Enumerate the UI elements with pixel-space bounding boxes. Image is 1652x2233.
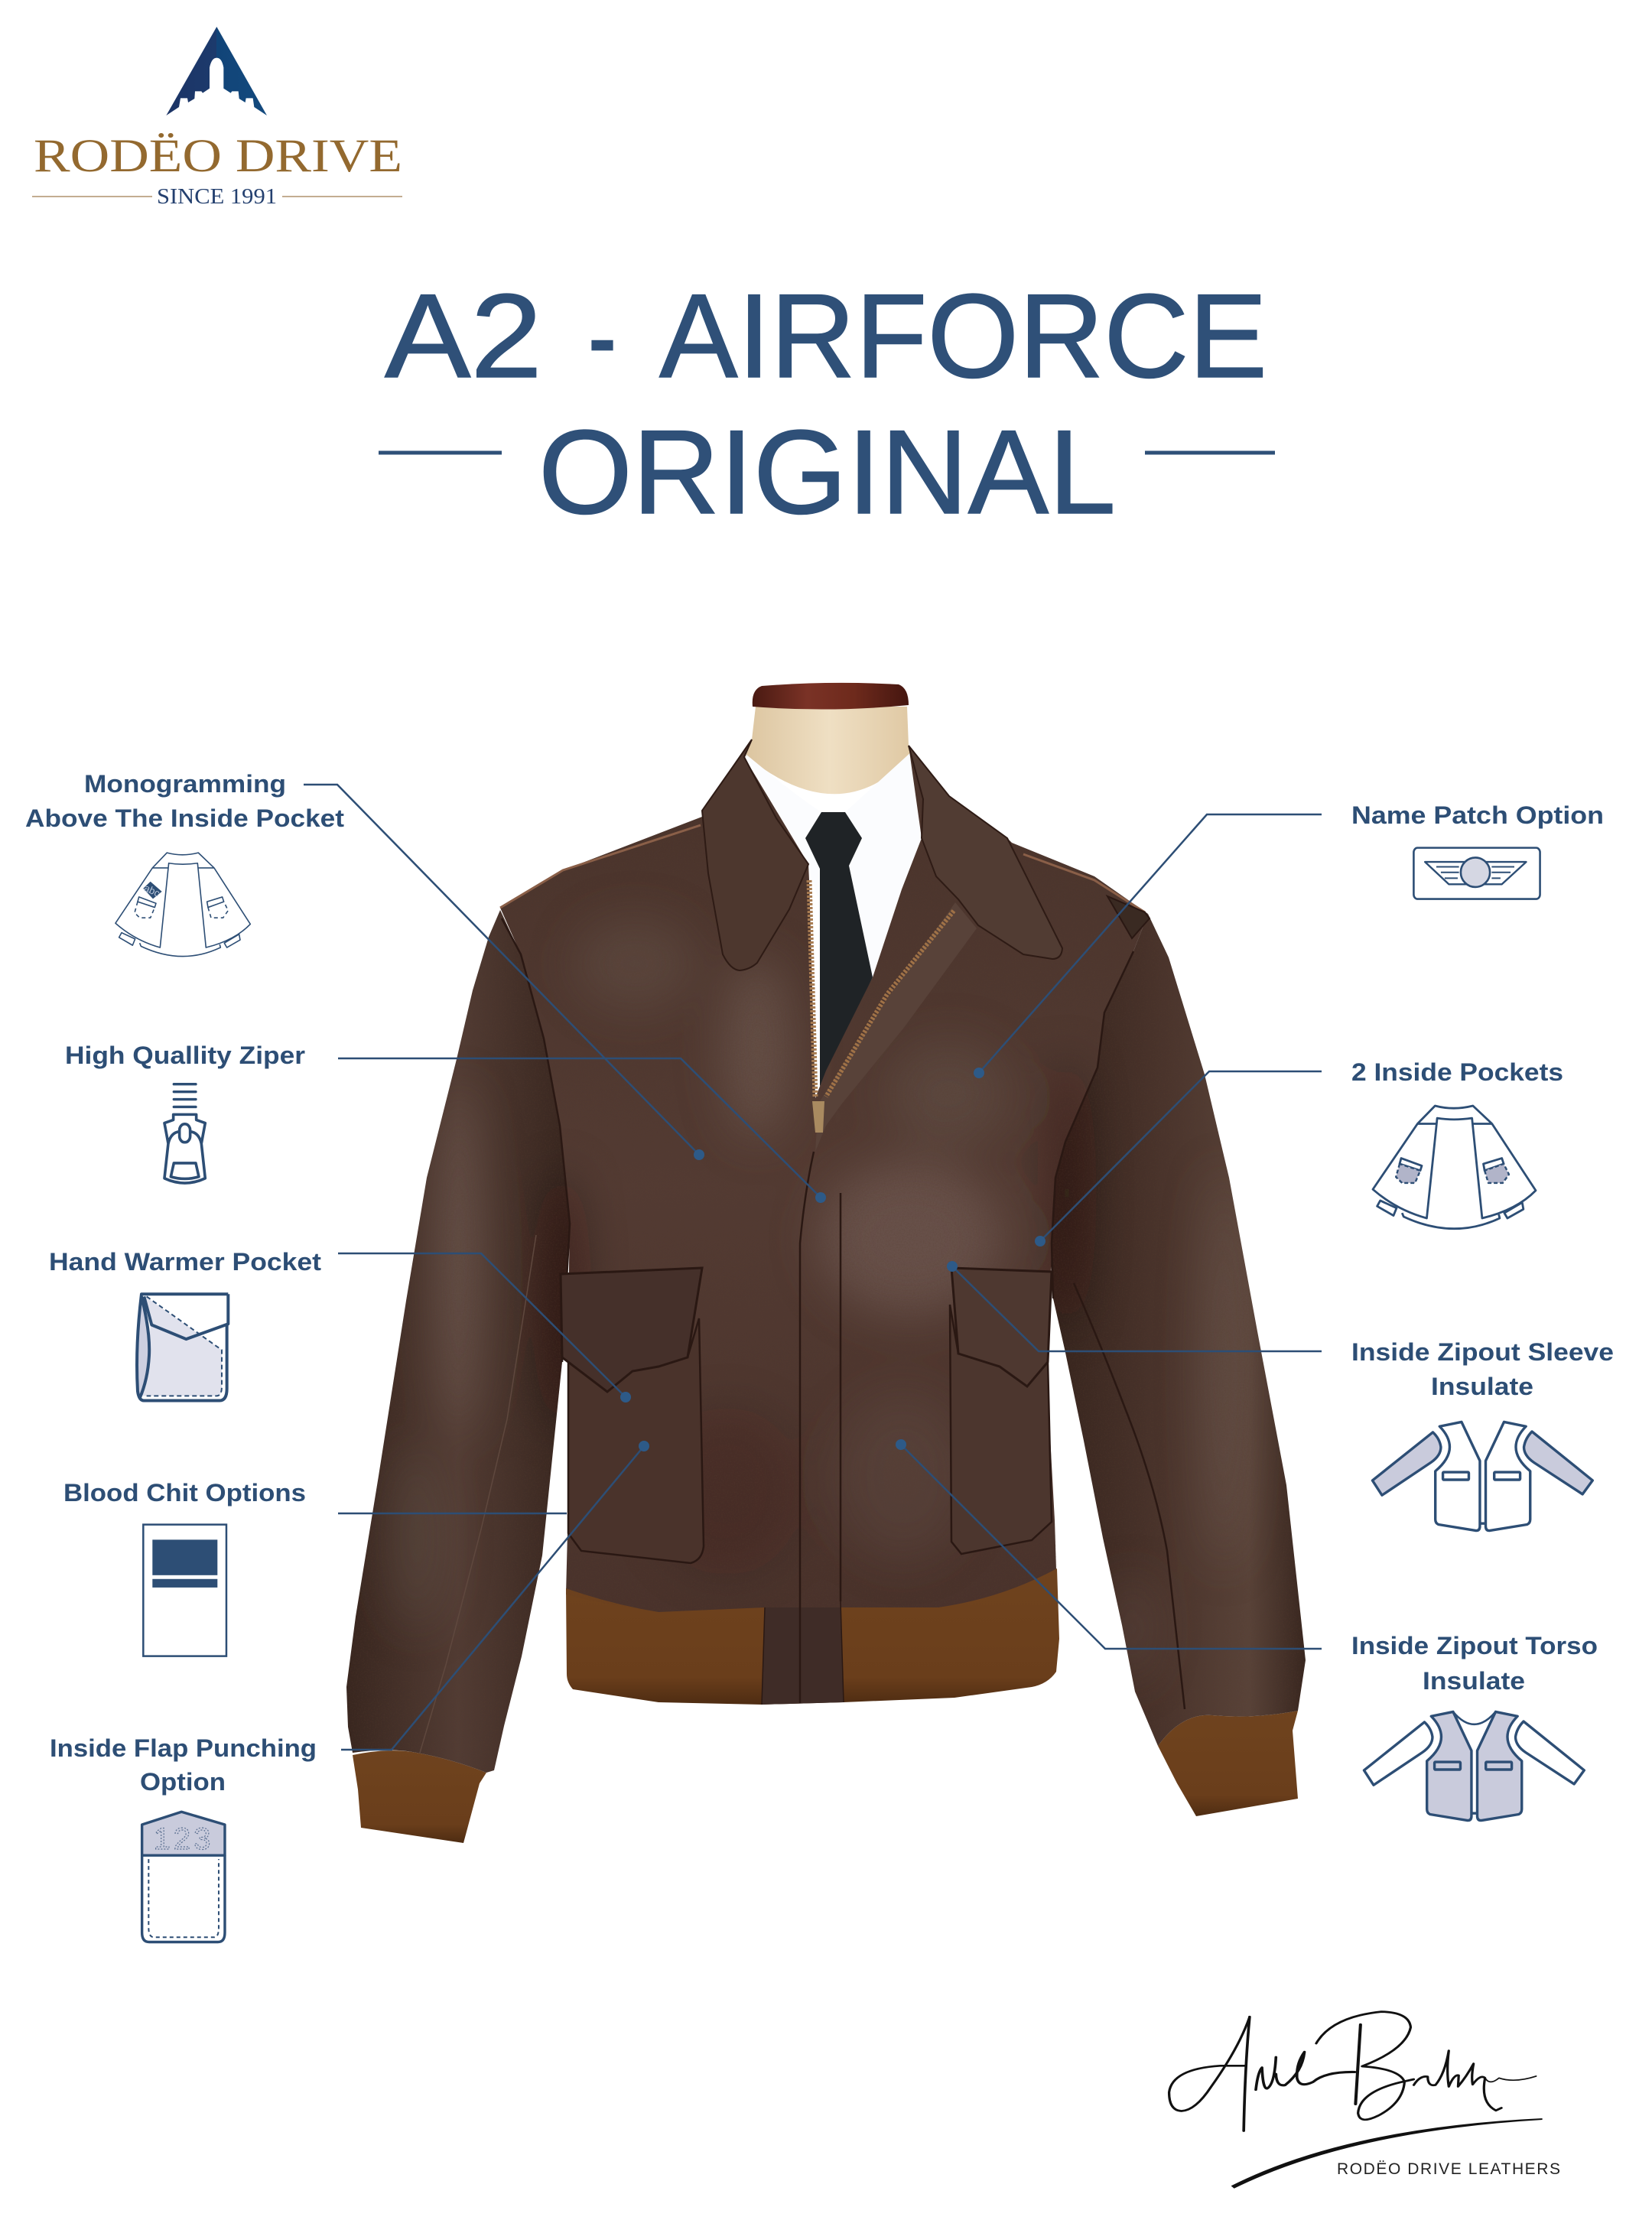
callout: monogramming xyxy=(304,785,704,1160)
icon text: punched digits: 123 xyxy=(154,1822,213,1856)
label: Hand Warmer Pocket xyxy=(49,1248,321,1276)
icon: pocket xyxy=(137,1294,228,1401)
left pocket xyxy=(561,1268,704,1563)
feature: name patch xyxy=(1351,801,1604,899)
feature: zipout sleeve xyxy=(1351,1338,1614,1531)
label: High Quallity Ziper xyxy=(65,1042,305,1069)
label line 2: Above The Inside Pocket xyxy=(25,804,344,832)
shoulder trim and seams xyxy=(420,825,1185,1753)
title xyxy=(379,270,1275,539)
callout: zipout sleeve xyxy=(947,1261,1322,1351)
title: - xyxy=(588,270,616,403)
label: Monogramming xyxy=(84,770,286,798)
right cuff xyxy=(1158,1711,1298,1816)
signature xyxy=(1169,2012,1560,2189)
label line 2: Insulate xyxy=(1431,1373,1533,1400)
left cuff xyxy=(353,1750,486,1843)
icon: zipper pull xyxy=(164,1084,205,1183)
title: AIRFORCE xyxy=(659,270,1267,403)
icon: chit card xyxy=(143,1525,226,1656)
hem band xyxy=(566,1568,1059,1705)
label: Inside Zipout Sleeve xyxy=(1351,1338,1614,1366)
right sleeve xyxy=(1048,914,1306,1746)
title: ORIGINAL xyxy=(538,406,1116,539)
signature strokes xyxy=(1169,2012,1543,2189)
title: A2 xyxy=(385,270,542,403)
label: 2 Inside Pockets xyxy=(1351,1058,1563,1086)
signature caption: RODËO DRIVE LEATHERS xyxy=(1337,2160,1560,2178)
label: Name Patch Option xyxy=(1351,801,1604,829)
left collar xyxy=(702,739,808,970)
label: Blood Chit Options xyxy=(63,1479,306,1507)
label line 2: Insulate xyxy=(1423,1667,1525,1695)
jacket body xyxy=(500,746,1148,1625)
mannequin neck xyxy=(746,707,913,794)
logo mark: peak xyxy=(166,27,267,115)
callout: inside pockets xyxy=(1035,1071,1322,1247)
necktie xyxy=(805,812,873,1086)
callout: name patch xyxy=(974,814,1322,1078)
feature: zipper xyxy=(65,1042,305,1183)
icon: torso liner xyxy=(1364,1711,1584,1821)
right collar xyxy=(909,746,1062,959)
centre placket seams xyxy=(762,1152,844,1705)
logo since line: SINCE 1991 xyxy=(157,185,277,209)
callout: zipout torso xyxy=(896,1439,1322,1649)
icon: punched flap pocket xyxy=(142,1812,225,1942)
right pocket xyxy=(950,1268,1052,1554)
feature: zipout torso xyxy=(1351,1632,1598,1821)
callout: blood chit xyxy=(338,1513,567,1514)
callout: hand warmer pocket xyxy=(338,1253,631,1403)
icon text: monogram: abc xyxy=(142,882,162,899)
callout: zipper xyxy=(338,1058,826,1203)
feature: monogramming xyxy=(25,770,344,957)
logo xyxy=(32,27,402,209)
callout lines and dots xyxy=(304,785,1322,1750)
front placket at hem xyxy=(762,1607,844,1705)
feature: hand warmer pocket xyxy=(49,1248,321,1401)
callout: inside flap punching xyxy=(341,1441,649,1750)
mannequin wood cap xyxy=(753,683,909,710)
left sleeve xyxy=(346,910,570,1773)
leather highlights and shadows xyxy=(337,734,1315,1858)
label: Inside Zipout Torso xyxy=(1351,1632,1598,1659)
icon: wings patch xyxy=(1413,848,1540,899)
label: Inside Flap Punching xyxy=(50,1734,317,1762)
logo wordmark: RODËO DRIVE xyxy=(34,131,402,182)
icon: inside of jacket xyxy=(115,853,250,957)
icon: inside of jacket with pockets xyxy=(1373,1106,1536,1229)
feature: blood chit xyxy=(63,1479,306,1656)
icon: sleeve liner xyxy=(1372,1422,1592,1531)
storm flap and zipper xyxy=(809,880,977,1152)
leather grain xyxy=(346,774,1305,1752)
jacket photo xyxy=(337,683,1315,1858)
feature: inside flap punching xyxy=(50,1734,317,1942)
label line 2: Option xyxy=(140,1768,226,1796)
shirt xyxy=(746,750,922,994)
feature: inside pockets xyxy=(1351,1058,1563,1229)
